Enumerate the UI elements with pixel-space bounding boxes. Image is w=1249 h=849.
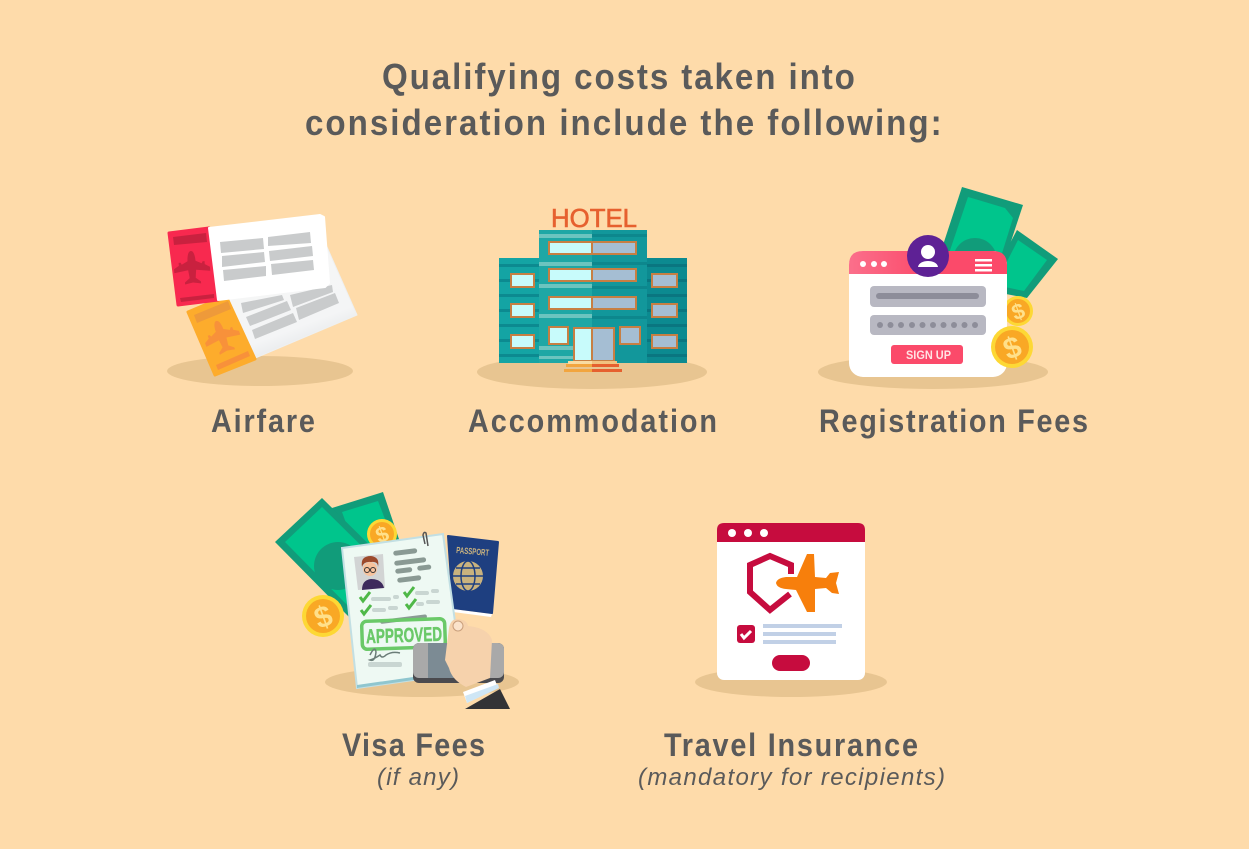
label: Travel Insurance: (mandatory for recipients)	[638, 764, 945, 791]
label: Visa Fees: (if any)	[377, 764, 459, 791]
label: Visa Fees	[342, 728, 485, 791]
approved stamp	[362, 619, 445, 649]
passport	[448, 536, 498, 617]
icon: visa documents: $	[310, 599, 337, 636]
shield	[750, 556, 791, 610]
registration coins	[1003, 296, 1033, 326]
registration coins: $	[1008, 298, 1028, 325]
icon: visa documents	[275, 492, 519, 709]
portrait	[354, 554, 385, 590]
title	[305, 58, 942, 143]
hand stamp	[413, 619, 510, 709]
label: Registration Fees: Registration Fees	[819, 404, 1088, 439]
label: Travel Insurance	[638, 728, 945, 791]
title: Qualifying costs taken into	[382, 58, 855, 97]
icon: visa documents: $	[372, 521, 392, 548]
icon: registration form: $	[999, 330, 1026, 367]
label: Travel Insurance: Travel Insurance	[664, 728, 918, 763]
sign up button	[891, 345, 963, 364]
icon: hotel building	[477, 203, 707, 389]
label: Visa Fees: Visa Fees	[342, 728, 485, 763]
icon: registration form	[818, 187, 1058, 389]
checkbox	[737, 625, 755, 643]
approved stamp: APPROVED	[366, 624, 442, 648]
title: consideration include the following:	[305, 104, 942, 143]
icon: airfare tickets	[167, 215, 357, 386]
plane	[776, 554, 839, 612]
avatar	[907, 235, 949, 277]
sign up button: SIGN UP	[906, 348, 951, 362]
passport: PASSPORT	[456, 545, 490, 558]
label: Airfare: Airfare	[211, 404, 315, 439]
hotel sign: HOTEL	[551, 203, 637, 233]
label: Accommodation: Accommodation	[468, 404, 717, 439]
icon: travel insurance window	[695, 523, 887, 697]
